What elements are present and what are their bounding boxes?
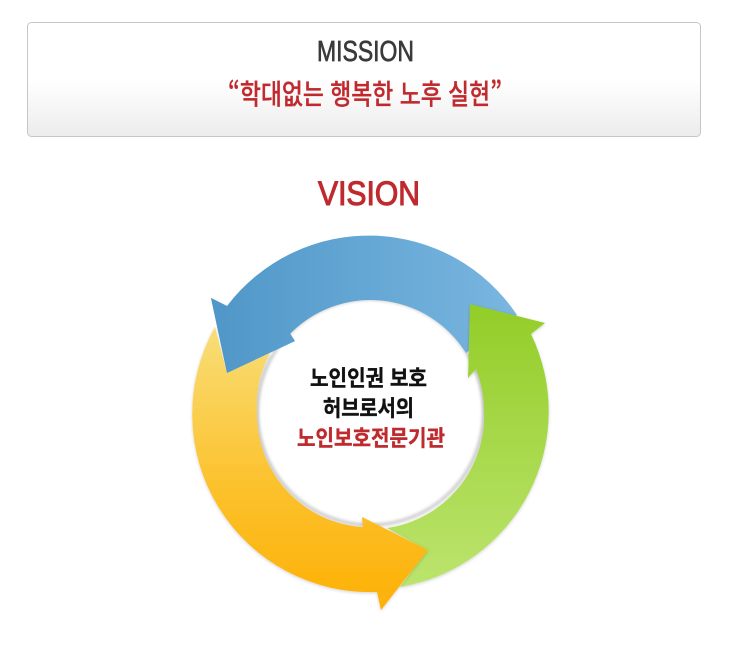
arrow: blue xyxy=(211,236,517,373)
mission box xyxy=(28,22,700,136)
heading: MISSION: MISSION xyxy=(317,36,414,68)
diagram: vision cycle xyxy=(192,236,549,610)
center line 1: 노인인권 보호 xyxy=(310,361,427,393)
center line 3: 노인보호전문기관 xyxy=(297,421,445,453)
center text xyxy=(297,361,445,453)
inner circle shadow xyxy=(258,299,484,525)
panel: mission xyxy=(28,22,700,136)
mission statement: “학대없는 행복한 노후 실현” xyxy=(228,73,502,113)
arrow head: blue xyxy=(211,290,295,373)
heading: VISION: VISION xyxy=(318,175,420,213)
center line 2: 허브로서의 xyxy=(323,391,414,423)
arrow: green xyxy=(387,304,549,587)
arrow: yellow xyxy=(192,327,428,610)
